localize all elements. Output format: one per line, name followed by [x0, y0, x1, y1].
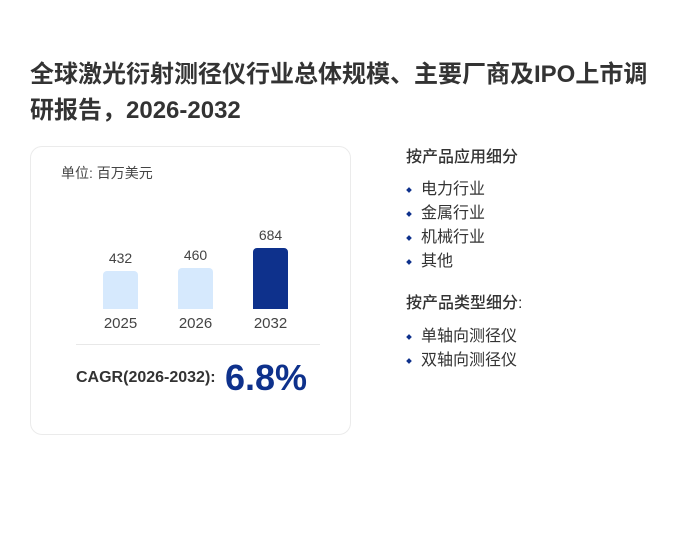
panel: market size chart card	[30, 146, 351, 435]
divider	[76, 344, 320, 345]
item: 电力行业	[421, 181, 485, 198]
CAGR label: CAGR(2026-2032):	[76, 369, 216, 386]
bar 2032	[253, 248, 288, 309]
item	[406, 252, 453, 270]
heading: by type: 按产品类型细分:	[406, 295, 522, 312]
item: 金属行业	[421, 205, 485, 222]
list: by type	[406, 327, 517, 369]
bar 2025	[103, 271, 138, 309]
item: 其他	[421, 253, 453, 270]
value label 2026: 460	[184, 247, 207, 263]
item: 机械行业	[421, 229, 485, 246]
year label 2025: 2025	[104, 315, 137, 332]
bar 2026	[178, 268, 213, 309]
title: 研报告，2026-2032	[30, 97, 241, 124]
year label 2032: 2032	[254, 315, 287, 332]
CAGR value: 6.8%	[225, 357, 307, 398]
unit label: 单位: 百万美元	[61, 165, 153, 181]
title	[30, 61, 647, 124]
panel: segment lists	[406, 148, 522, 369]
value label 2025: 432	[109, 250, 132, 266]
item: 双轴向测径仪	[421, 352, 517, 369]
list: by application	[406, 180, 485, 270]
heading: by application: 按产品应用细分	[406, 149, 518, 166]
value label 2032: 684	[259, 227, 282, 243]
title: 全球激光衍射测径仪行业总体规模、主要厂商及IPO上市调	[30, 61, 647, 88]
year label 2026: 2026	[179, 315, 212, 332]
item: 单轴向测径仪	[421, 328, 517, 345]
